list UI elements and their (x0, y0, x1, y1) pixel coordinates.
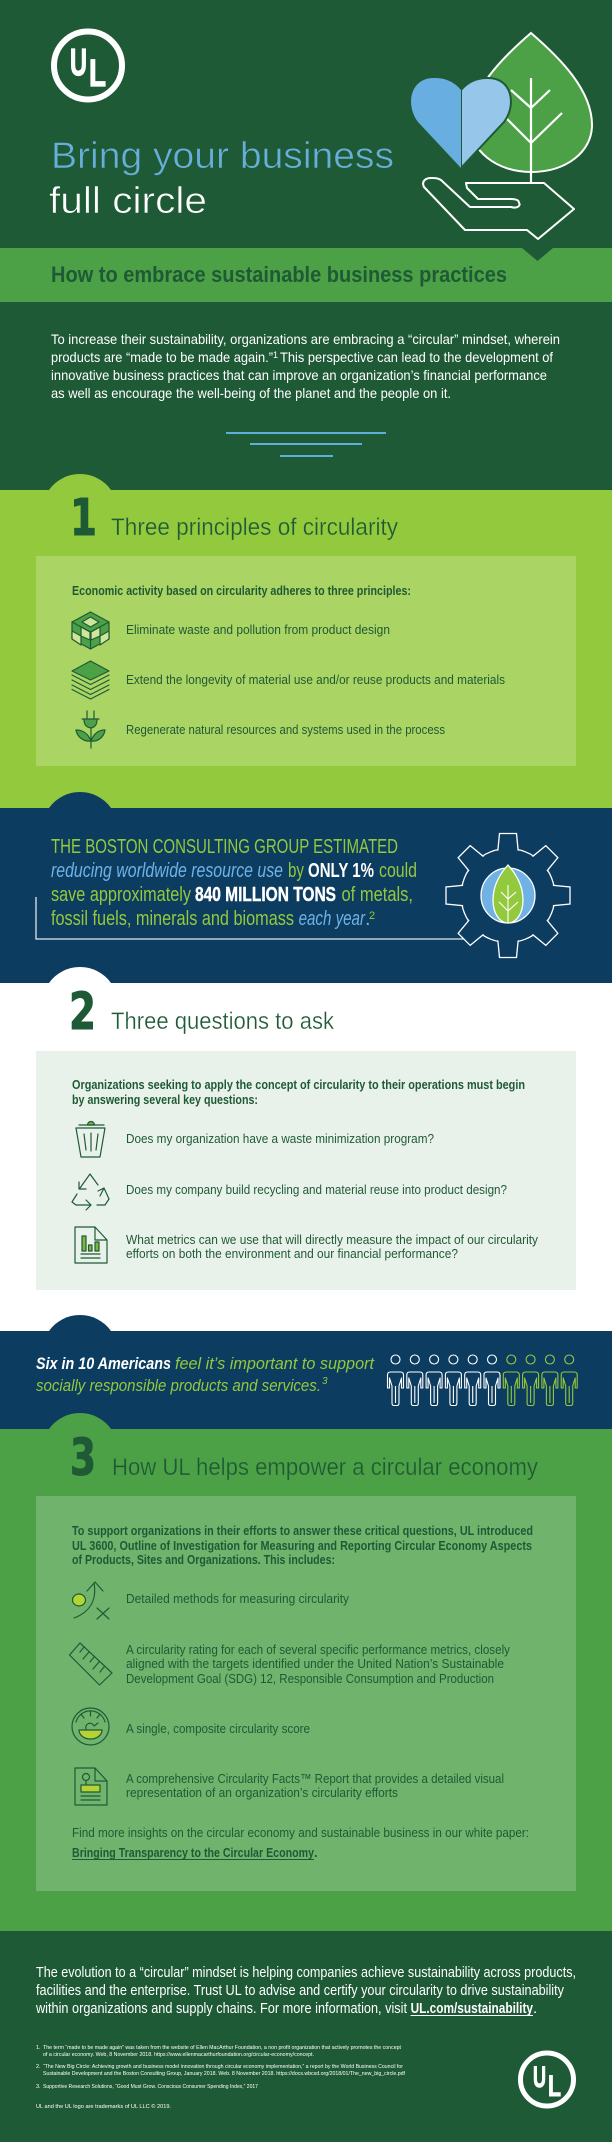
text: detailed methods: Detailed methods for measuring circularity (126, 1591, 349, 1606)
card: principles (36, 556, 576, 766)
panel: six in ten statistic (0, 1315, 612, 1429)
statistic text: Six in 10 Americans (36, 1354, 171, 1373)
heading: three principles: Three principles of circularity (111, 514, 398, 541)
logo: UL: L (89, 53, 106, 95)
text: find more insights: . (314, 1845, 318, 1860)
card intro: Organizations seeking to apply the concept of circularity to their operations must begin (72, 1077, 525, 1092)
text: question 3: efforts on both the environment and our financial performance? (126, 1246, 458, 1261)
card intro: by answering several key questions: (72, 1092, 258, 1107)
text: question 2: Does my company build recycling and material reuse into product design? (126, 1182, 507, 1197)
closing statement (35, 1964, 576, 2017)
text: find more insights (72, 1825, 529, 1860)
footnotes: The term “made to be made again” was taken from the website of Ellen MacArthur Foundation, a non profit organization that actively promotes the concept (43, 2045, 401, 2051)
statistic text: ONLY 1% (308, 860, 374, 882)
intro text: products are “made to be made again.” (51, 349, 273, 365)
statistic text: feel it’s important to support (175, 1354, 375, 1373)
panel: section 3 (0, 1413, 612, 1931)
icon: plug plant (76, 711, 105, 748)
panel: introduction (0, 302, 612, 490)
card intro (72, 1523, 533, 1567)
logo: UL (54, 32, 122, 100)
footnotes: 1. (36, 2045, 41, 2051)
intro text: as well as encourage the well-being of the planet and the people on it. (51, 385, 451, 401)
statistic text: . (365, 908, 371, 930)
statistic text: reducing worldwide resource use (51, 860, 283, 882)
text: regenerate: Regenerate natural resources and systems used in the process (126, 722, 445, 737)
icon: heart and tree in hand (411, 33, 592, 239)
closing statement: UL.com/sustainability (411, 2000, 534, 2017)
statistic text (36, 1354, 375, 1395)
text: find more insights: Find more insights on the circular economy and sustainable business in our white paper: (72, 1825, 529, 1840)
footnotes: Supportive Research Solutions, “Good Must Grow. Conscious Consumer Spending Index,” 2017 (43, 2084, 258, 2090)
panel: footer (0, 1931, 612, 2142)
statistic text (51, 836, 417, 930)
statistic text: each year (299, 908, 366, 930)
panel: header (0, 0, 612, 248)
footnotes: 3. (36, 2084, 41, 2090)
footnotes: 2. (36, 2064, 41, 2070)
number 2: 2 (69, 983, 96, 1042)
statistic text: of metals, (342, 884, 413, 906)
statistic text: fossil fuels, minerals and biomass (51, 908, 294, 930)
intro text: 1 (273, 350, 278, 360)
statistic text: THE BOSTON CONSULTING GROUP ESTIMATED (51, 836, 398, 858)
title (49, 135, 394, 221)
text: eliminate waste: Eliminate waste and pollution from product design (126, 622, 390, 637)
title: full circle (49, 180, 207, 221)
card intro (72, 1077, 525, 1107)
card: UL 3600 (36, 1496, 576, 1891)
statistic text: 3 (322, 1376, 328, 1387)
subtitle: How to embrace sustainable business practices (51, 262, 507, 287)
text: circularity facts: representation of an organization’s circularity efforts (126, 1785, 398, 1800)
intro text (51, 331, 560, 401)
statistic text: socially responsible products and services. (36, 1376, 321, 1395)
text: circularity rating: aligned with the targets identified under the United Nation’s Sustainable (126, 1656, 504, 1671)
footnotes: Sustainable Development and the Boston Consulting Group, January 2018. Web. 8 November 2018. https://docs.wbcsd.org/2018/01/The_new_big_circle.pdf (43, 2071, 405, 2077)
icon: gauge score (72, 1708, 109, 1745)
icon: recycle arrows (72, 1174, 109, 1210)
panel: subtitle band (0, 248, 612, 302)
intro text: This perspective can lead to the development of (280, 349, 553, 365)
logo: UL footer: U (533, 2061, 546, 2094)
statistic text: by (288, 860, 304, 882)
card intro: of Products, Sites and Organizations. This includes: (72, 1552, 335, 1567)
text: find more insights: Bringing Transparency to the Circular Economy (72, 1845, 315, 1860)
intro text: To increase their sustainability, organizations are embracing a “circular” mindset, wherein (51, 331, 560, 347)
text: circularity facts (126, 1771, 504, 1800)
text: circularity rating (126, 1642, 510, 1686)
card: questions (36, 1051, 576, 1290)
closing statement: within organizations and supply chains. For more information, visit (35, 2000, 408, 2017)
statistic text: could (379, 860, 417, 882)
icon: layers (72, 661, 109, 699)
logo: UL: U (70, 42, 87, 84)
panel: section 1 (0, 474, 612, 808)
card intro: Economic activity based on circularity adheres to three principles: (72, 583, 411, 598)
heading: how UL helps: How UL helps empower a circular economy (112, 1454, 538, 1481)
text: question 3: What metrics can we use that will directly measure the impact of our circularity (126, 1232, 538, 1247)
text: composite score: A single, composite circularity score (126, 1721, 310, 1736)
text: circularity rating: Development Goal (SDG) 12, Responsible Consumption and Production (126, 1671, 494, 1686)
intro text: innovative business practices that can improve an organization’s financial performance (51, 367, 547, 383)
logo: UL footer (520, 2053, 574, 2106)
card intro: To support organizations in their efforts to answer these critical questions, UL introduced (72, 1523, 533, 1538)
title: Bring your business (51, 135, 394, 176)
closing statement: . (533, 2000, 537, 2017)
footnotes (36, 2045, 405, 2110)
text: question 3 (126, 1232, 538, 1261)
heading: three questions: Three questions to ask (111, 1008, 335, 1035)
icon: cube (72, 612, 109, 649)
footnotes: “The New Big Circle: Achieving growth and business model innovation through circular economy implementation,” a report by the World Business Council for (43, 2064, 403, 2070)
icon: trash can (76, 1122, 105, 1157)
statistic text: save approximately (51, 884, 191, 906)
icon: play diagram (72, 1582, 109, 1619)
number 1: 1 (70, 489, 97, 548)
icon: gear with leaf (446, 834, 570, 958)
icon: chart document (75, 1227, 107, 1263)
text: extend longevity: Extend the longevity of material use and/or reuse products and materials (126, 672, 505, 687)
text: circularity facts: A comprehensive Circularity Facts™ Report that provides a detailed visual (126, 1771, 504, 1786)
text: question 1: Does my organization have a waste minimization program? (126, 1131, 434, 1146)
logo: UL footer: L (548, 2070, 561, 2103)
icon: ruler (70, 1643, 112, 1685)
footnotes: of a circular economy. Web, 8 November 2018. https://www.ellenmacarthurfoundation.org/circular-economy/concept. (43, 2052, 314, 2058)
panel: Boston Consulting statistic (0, 792, 612, 983)
statistic text: 2 (369, 910, 375, 922)
footnotes: UL and the UL logo are trademarks of UL LLC © 2019. (36, 2103, 171, 2110)
panel: section 2 (0, 967, 612, 1331)
icon: report document (75, 1768, 107, 1805)
text: circularity rating: A circularity rating for each of several specific performance metrics, closely (126, 1642, 510, 1657)
connector line (36, 897, 466, 939)
statistic text: 840 MILLION TONS (195, 884, 336, 906)
card intro: UL 3600, Outline of Investigation for Measuring and Reporting Circular Economy Aspects (72, 1538, 532, 1553)
number 3: 3 (70, 1429, 96, 1488)
people pictogram (388, 1355, 577, 1406)
